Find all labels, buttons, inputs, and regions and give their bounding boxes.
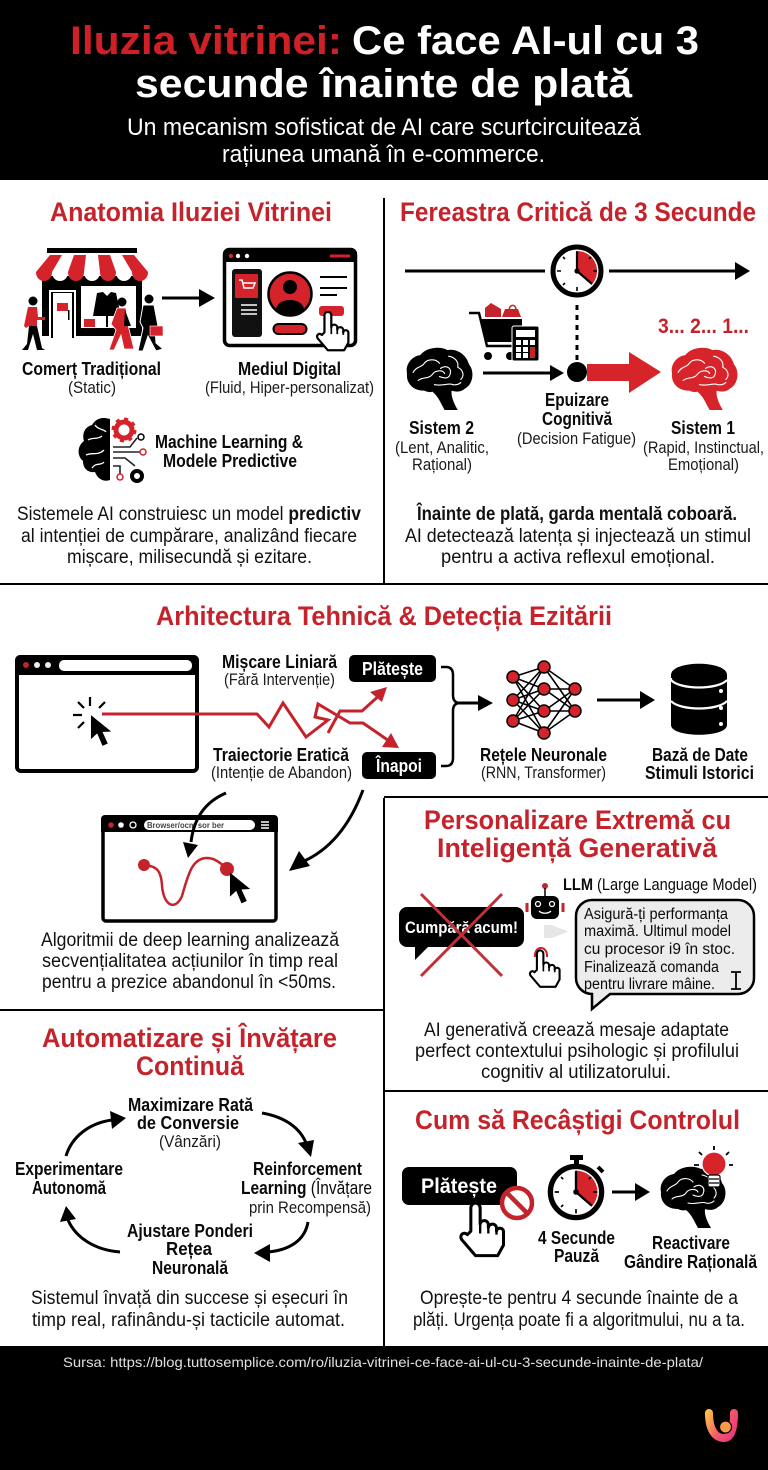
timeline arrow <box>405 262 750 280</box>
panel: personalizare extrema <box>399 805 757 1083</box>
label: traiectorie eratica: (Intenție de Abandon) <box>211 764 352 782</box>
label: comert traditional: (Static) <box>68 379 116 397</box>
heading: Cum să Recâștigi Controlul <box>415 1105 740 1135</box>
decision point <box>567 362 587 382</box>
label: mediul digital: Mediul Digital <box>238 358 341 379</box>
heading: Anatomia Iluziei Vitrinei <box>50 197 332 227</box>
shopper left <box>22 296 45 350</box>
generated message bubble <box>576 900 754 1009</box>
countdown: 3... 2... 1... <box>658 315 749 338</box>
arrow <box>162 289 215 307</box>
cycle arrows <box>60 1111 314 1262</box>
panel: fereastra critica <box>395 197 764 568</box>
icon: brain with light bulb <box>661 1146 733 1228</box>
label: sistem 1: Emoțional) <box>668 456 739 474</box>
label: comert traditional: Comerț Tradițional <box>22 358 161 379</box>
icon: stopwatch <box>550 1155 603 1218</box>
text block: pentru a prezice abandonul în <50ms. <box>42 972 336 993</box>
cycle node: experimentare: Experimentare <box>15 1158 123 1179</box>
dotted connector <box>576 305 578 360</box>
cycle node: maximizare <box>128 1094 254 1151</box>
label: sistem 2 <box>395 417 489 474</box>
text block <box>415 1020 739 1083</box>
button: plateste <box>349 655 436 682</box>
heading: Personalizare Extremă cu <box>424 805 731 835</box>
label: traiectorie eratica: Traiectorie Eratică <box>213 744 350 765</box>
cycle node: reinforcement <box>241 1158 372 1217</box>
title <box>70 19 699 106</box>
icon: clock <box>553 247 601 295</box>
text block: timp real, rafinându-și tacticile automat. <box>32 1310 345 1331</box>
brace with arrow <box>441 667 493 766</box>
curved arrow left <box>183 793 226 858</box>
label: reactivare <box>624 1232 758 1272</box>
icon: storefront with shoppers <box>22 248 163 351</box>
text block: AI detectează latența și injectează un stimul <box>405 526 751 547</box>
crossed out bubble: Cumpără acum! <box>405 919 518 937</box>
subtitle <box>127 114 642 168</box>
label: miscare liniara: Mișcare Liniară <box>222 651 338 672</box>
label: sistem 1: Sistem 1 <box>671 417 735 438</box>
text block: Sistemul învață din succese și eșecuri în <box>31 1288 348 1309</box>
label: mediul digital: (Fluid, Hiper-personalizat) <box>205 379 374 397</box>
label: epuizare cognitiva: Epuizare <box>545 389 609 410</box>
subtitle: Un mecanism sofisticat de AI care scurtcircuitează <box>127 114 642 141</box>
label: sistem 2: Sistem 2 <box>409 417 474 438</box>
label: epuizare cognitiva <box>517 389 636 448</box>
label: machine learning <box>155 431 303 471</box>
curved arrow right <box>289 790 363 871</box>
label: mediul digital <box>205 358 374 397</box>
generated message bubble: cu procesor i9 în stoc. <box>584 941 735 958</box>
label: machine learning: Modele Predictive <box>163 450 297 471</box>
shopper middle <box>109 298 134 350</box>
text block <box>17 504 361 568</box>
text block: pentru a activa reflexul emoțional. <box>441 547 715 568</box>
subtitle: rațiunea umană în e-commerce. <box>222 141 545 168</box>
panel: anatomia iluziei vitrinei <box>17 197 374 568</box>
logo <box>709 1413 734 1438</box>
label: baza de date: Bază de Date <box>652 744 748 765</box>
cycle node: reinforcement: prin Recompensă) <box>249 1199 371 1217</box>
cycle node: maximizare: Maximizare Rată <box>128 1094 254 1115</box>
header band <box>0 0 768 180</box>
label: retele neuronale <box>480 744 607 782</box>
faint connector <box>544 925 568 938</box>
cycle node: experimentare: Autonomă <box>32 1177 107 1198</box>
label: miscare liniara: (Fără Intervenție) <box>224 671 335 689</box>
red trajectories <box>102 687 399 748</box>
label: reactivare: Reactivare <box>652 1232 730 1253</box>
icon: black brain <box>407 348 472 410</box>
text block: mișcare, milisecundă și ezitare. <box>67 547 312 568</box>
title: Ce face AI-ul cu 3 <box>352 19 699 63</box>
panel: recastiga controlul <box>402 1105 758 1331</box>
label: traiectorie eratica <box>211 744 352 782</box>
arrow to fatigue point <box>483 365 564 381</box>
crossed out bubble <box>399 894 524 976</box>
label: sistem 1 <box>643 417 764 474</box>
label: retele neuronale: Rețele Neuronale <box>480 744 607 765</box>
icon: red brain <box>672 348 737 410</box>
text block <box>413 1288 745 1331</box>
label: machine learning: Machine Learning & <box>155 431 303 452</box>
generated message bubble: maximă. Ultimul model <box>584 923 731 940</box>
icon: analysis browser <box>101 815 278 921</box>
text block: perfect contextului psihologic și profilului <box>415 1041 739 1062</box>
text block: al intenției de cumpărare, analizând fiecare <box>21 526 357 547</box>
cycle node: reinforcement: Learning (Învățare <box>241 1177 372 1198</box>
footer band <box>0 1346 768 1470</box>
label: sistem 2: Rațional) <box>412 456 472 474</box>
icon: neural network <box>507 661 581 739</box>
button: inapoi: Înapoi <box>375 755 422 776</box>
cycle node: maximizare: de Conversie <box>137 1112 239 1133</box>
button with hand and stop sign <box>402 1167 532 1256</box>
button: plateste: Plătește <box>362 658 423 679</box>
heading <box>42 1023 337 1081</box>
icon: robot <box>527 883 563 919</box>
cycle node: ajustare: Neuronală <box>152 1257 229 1278</box>
cycle node: ajustare <box>127 1220 253 1278</box>
generated message bubble: Finalizează comanda <box>584 959 719 976</box>
heading: Inteligență Generativă <box>437 833 717 863</box>
text block: Oprește-te pentru 4 secunde înainte de a <box>420 1288 738 1309</box>
arrow to database <box>597 691 655 709</box>
icon: database <box>671 664 727 735</box>
label: comert traditional <box>22 358 161 397</box>
button: inapoi <box>362 752 436 779</box>
cycle node: ajustare: Rețea <box>166 1238 213 1259</box>
generated message bubble: Asigură-ți performanța <box>584 906 728 923</box>
label: 4 secunde pauza <box>538 1227 615 1266</box>
label: epuizare cognitiva: (Decision Fatigue) <box>517 430 636 448</box>
text block: AI generativă creează mesaje adaptate <box>424 1020 729 1041</box>
title: secunde înainte de plată <box>135 62 633 106</box>
heading <box>424 805 731 863</box>
generated message bubble: pentru livrare mâine. <box>584 976 715 993</box>
text block: Algoritmii de deep learning analizează <box>41 930 339 951</box>
label: baza de date <box>645 744 754 783</box>
label: sistem 2: (Lent, Analitic, <box>395 439 489 457</box>
label: epuizare cognitiva: Cognitivă <box>542 408 613 429</box>
cycle node: reinforcement: Reinforcement <box>253 1158 362 1179</box>
red arrow <box>587 352 661 393</box>
text block: cognitiv al utilizatorului. <box>481 1062 671 1083</box>
label: retele neuronale: (RNN, Transformer) <box>481 764 606 782</box>
label: 4 secunde pauza: 4 Secunde <box>538 1227 615 1248</box>
cycle node: experimentare <box>15 1158 123 1198</box>
source link: Sursa: https://blog.tuttosemplice.com/ro/iluzia-vitrinei-ce-face-ai-ul-cu-3-secunde-inainte-de-plata/ <box>63 1354 703 1370</box>
cycle node: ajustare: Ajustare Ponderi <box>127 1220 253 1241</box>
cycle node: maximizare: (Vânzări) <box>159 1133 221 1151</box>
icon: machine learning brain <box>79 418 146 481</box>
icon: analysis browser: Browser/ocm sor ber <box>147 821 224 830</box>
text block <box>41 930 339 993</box>
label: miscare liniara <box>222 651 338 689</box>
arrow <box>612 1183 650 1201</box>
button with hand and stop sign: Plătește <box>421 1175 497 1198</box>
label: 4 secunde pauza: Pauză <box>554 1245 600 1266</box>
icon: browser window <box>15 655 199 771</box>
title: Iluzia vitrinei: <box>70 19 342 63</box>
icon: cart with calculator <box>469 303 539 361</box>
text block <box>31 1288 348 1331</box>
panel: arhitectura tehnica <box>15 601 754 993</box>
text block <box>405 503 751 568</box>
icon: digital interface <box>223 248 357 350</box>
shopper right <box>138 294 163 351</box>
heading: Continuă <box>136 1051 244 1081</box>
text block: Sistemele AI construiesc un model predictiv <box>17 504 361 525</box>
heading: Arhitectura Tehnică & Detecția Ezitării <box>156 601 612 631</box>
heading: Automatizare și Învățare <box>42 1023 337 1053</box>
panel: automatizare <box>15 1023 372 1331</box>
text block: secvențialitatea acțiunilor în timp real <box>42 951 338 972</box>
icon: tapping hand <box>530 948 560 987</box>
